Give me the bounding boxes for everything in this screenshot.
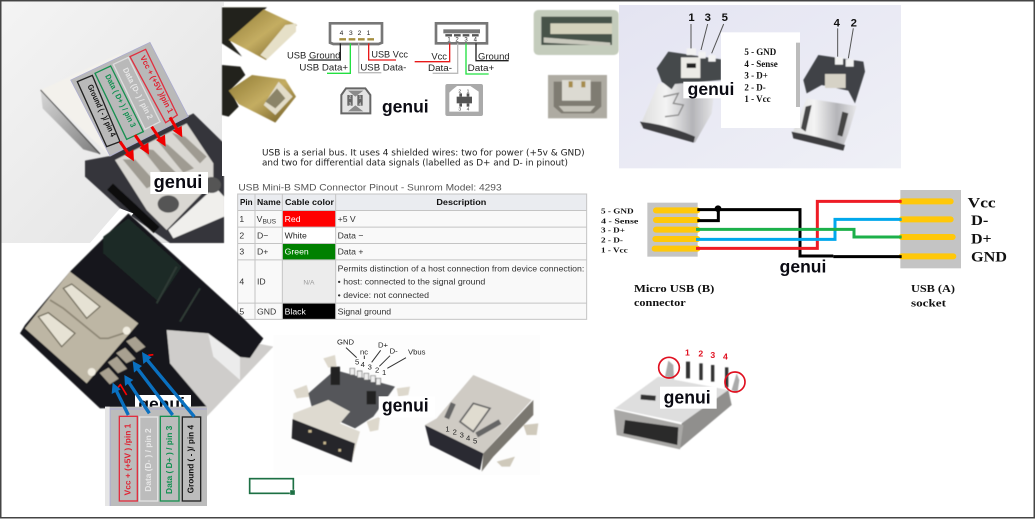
pin numbers: 1 [688,12,695,24]
connector caption: USB A: USB (A) [911,284,955,295]
row cells: Data + [338,247,363,257]
pin numbers: 5 [722,12,728,24]
connector caption: micro USB [634,284,714,309]
black housing [20,213,263,408]
row cells: D− [257,230,268,240]
row cells: ID [257,277,266,287]
header row: Pin [240,197,253,207]
watermark: genui [688,79,734,99]
pin numbers: 4 [723,352,728,362]
diagram: USB B socket pins [445,84,483,116]
pin labels [337,337,477,446]
pin numbers: 2 [698,349,703,359]
label: Data plus: Data ( D+ ) / pin 3 [164,425,174,494]
row cells: 1 [239,214,244,224]
leader lines [346,348,406,368]
row cells: • host: connected to the signal ground [338,277,486,287]
pin labels: 1 [382,368,386,377]
panel: USB Mini-B pinout table [238,182,587,319]
left pin list: 5 - GND [601,206,634,215]
connector caption: USB A [911,284,955,310]
label: Data minus: Data (D- ) / pin 2 [143,428,153,492]
pin label card [105,407,207,506]
pin labels: 4 [361,360,366,369]
row cells: Red [285,214,301,224]
row cells: Black [285,307,307,317]
row cells: GND [257,307,276,317]
pin labels: D+ [378,341,389,350]
pin list box: 1 - Vcc [744,94,771,104]
right pin labels: D- [971,213,988,229]
wire labels: Data- [428,63,452,73]
diagram: USB B socket pins: 3 [458,107,461,113]
pin labels: 3 [460,431,464,440]
diagram: USB A plug pins: 2 [358,30,362,37]
red circles [659,357,679,378]
red arrows to pins [120,117,182,161]
pin list box: 3 - D+ [744,71,768,81]
row cells: Permits distinction of a host connection from device connection: [338,263,584,273]
table title: USB Mini-B SMD Connector Pinout - Sunrom Model: 4293 [238,182,502,192]
label: Vcc: Vcc + (+5V ) /pin 1 [123,423,133,495]
left pin list: 3 - D+ [601,226,625,235]
pin leader lines [691,24,853,58]
pin labels: 3 [368,363,372,372]
connector caption: micro USB: connector [634,298,686,309]
selection rectangle [250,479,295,495]
pin labels: 5 [355,357,359,366]
row cells: 2 [239,230,244,240]
pin list box [721,32,800,128]
wire labels [287,50,510,73]
left pin list: 1 - Vcc [601,245,628,254]
caption [262,148,585,169]
label: Ground: Ground ( - )/ pin 4 [185,425,195,493]
header row: Name [257,197,281,207]
diagram: USB B plug pins: 1 [359,95,362,101]
photo: USB A plug [222,7,297,60]
right pin labels [968,196,1007,266]
right pin labels: GND [971,250,1007,266]
row cells: • device: not connected [338,290,429,300]
diagram: USB A plug pins [330,23,382,44]
right pin labels: D+ [971,231,992,247]
wire labels: USB Data+ [299,62,348,72]
connector caption: USB A: socket [911,299,947,310]
row cells: +5 V [338,214,356,224]
panel: USB A plug with numbered pins [614,348,745,449]
row cells: Green [285,247,309,257]
pin numbers: 2 [851,18,857,30]
pin list box: 5 - GND [744,47,777,57]
panel: USB A plug photo with pin labels [0,2,224,243]
watermark: genui [382,395,429,416]
diagram: USB A plug pins: 3 [349,30,353,37]
diagram: USB A socket pins [436,23,487,43]
header row: Cable color [285,197,335,207]
photo: USB B plug [222,65,296,123]
wires [696,201,902,257]
wire labels: USB Data- [360,62,406,72]
wire labels: USB Ground [287,51,340,61]
diagram: USB A plug pins: 1 [367,30,371,37]
row cells: D+ [257,247,268,257]
wire labels: Data+ [468,63,494,73]
left micro USB plug [640,48,721,143]
white photo edge [90,208,133,257]
row cells: BUS [262,218,277,225]
wires [308,43,509,74]
pin numbers: 4 [834,18,841,30]
row cells: 5 [239,307,244,317]
label: Data plus: Data ( D+ ) / pin 3 [103,73,138,129]
panel: Micro USB plug photo [619,5,901,168]
label: Vcc: Vcc + (+5V )/pin 1 [138,54,175,115]
label: Ground: Ground ( - )/ pin 4 [86,83,118,139]
row cells: 4 [239,277,244,287]
pin labels: 2 [453,427,457,436]
diagram: USB B plug pins: 3 [349,101,352,107]
pin numbers: 1 [685,348,690,358]
pin labels: D- [390,346,398,355]
row cells: V [257,214,262,224]
diagram: USB A socket pins: 3 [464,37,468,43]
paper background [167,330,273,417]
right micro USB plug [792,55,865,151]
wire labels: Ground [478,51,510,61]
pin list box: 4 - Sense [744,59,778,69]
pin label card [71,42,188,156]
row cells [239,214,584,317]
micro USB contacts [647,203,698,257]
left mini USB connector [292,355,410,462]
header row [240,197,486,207]
diagram: USB B socket pins: 1 [467,89,470,95]
diagram: USB B plug pins [341,88,370,113]
diagram: USB B socket pins: 4 [467,107,470,113]
row cells: N/A [303,279,315,286]
metal shell [25,272,138,383]
pin labels: 4 [466,434,471,443]
right mini USB connector [425,375,538,472]
watermark: genui [780,257,826,277]
label: Data minus: Data (D- ) / pin 2 [121,66,155,121]
watermark: genui [154,171,202,192]
caption: and two for differential data signals (labelled as D+ and D- in pinout) [262,159,568,169]
diagram: USB A socket pins: 2 [455,37,459,43]
watermark: genui [382,97,429,117]
pin numbers [685,348,728,362]
row cells: Data − [338,230,363,240]
pin list box: 2 - D- [744,82,766,92]
pin labels: 5 [473,437,477,446]
watermark: genui [138,394,185,414]
row cells: 3 [239,247,244,257]
pin labels: 2 [375,365,379,374]
connector caption: micro USB: Micro USB (B) [634,284,714,295]
left pin list: 2 - D- [601,236,624,245]
pin labels: Vbus [408,347,426,356]
diagram: USB B socket pins: 2 [458,89,461,95]
pin numbers: 3 [710,350,715,360]
wire labels: USB Vcc [371,50,409,60]
table body [238,194,587,319]
pin numbers: 3 [705,12,711,24]
socket pins [102,338,143,383]
header row: Description [436,197,486,207]
left pin list: 4 - Sense [601,216,639,225]
panel: USB A and B pinout diagram [222,6,621,176]
row cells: Signal ground [338,307,391,317]
pin labels: 1 [445,424,450,433]
USB A contacts [900,190,961,268]
row cells: White [285,230,307,240]
photo: USB A socket [534,10,619,55]
watermark: genui [664,386,711,407]
diagram: USB A plug pins: 4 [340,30,344,37]
pin numbers [688,12,857,30]
right pin labels: Vcc [968,196,996,212]
panel: Micro USB to USB A wiring diagram [601,190,1007,310]
caption: USB is a serial bus. It uses 4 shielded wires: two for power (+5v & GND) [262,148,585,158]
panel: Mini USB connector photo [250,335,540,495]
plug body [614,361,739,449]
diagram: USB A socket pins: 1 [447,37,451,43]
blue arrows to pins [112,352,194,417]
diagram: USB B plug pins: 2 [349,95,352,101]
diagram: USB A socket pins: 4 [474,37,478,43]
photo: USB B socket [548,75,607,118]
left pin list [601,206,639,254]
panel: USB A socket photo [20,208,273,506]
pin labels: nc [360,347,368,356]
pin labels: GND [337,337,354,346]
wire labels: Vcc [431,51,448,61]
diagram: USB B plug pins: 4 [359,101,362,107]
